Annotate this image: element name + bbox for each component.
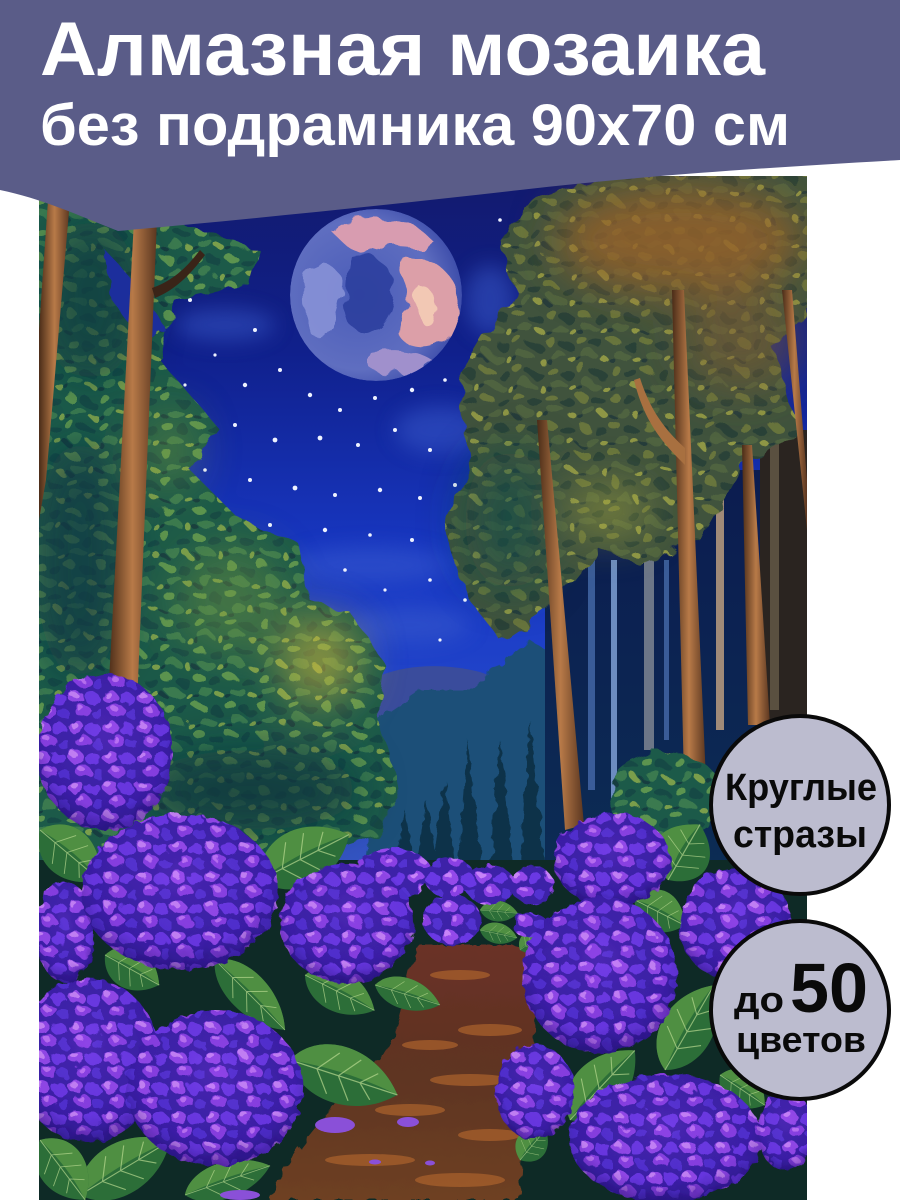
badge: up to 50 colours xyxy=(711,921,889,1099)
hydrangea leaves xyxy=(22,808,775,1200)
right tree canopy xyxy=(445,170,815,640)
far blossoms xyxy=(355,848,554,945)
stars xyxy=(183,218,502,642)
large blossoms xyxy=(16,674,813,1200)
badge: up to 50 colours: до xyxy=(734,979,784,1020)
badge: up to 50 colours: цветов xyxy=(736,1019,866,1060)
night sky xyxy=(161,176,807,860)
right deep forest with distant trunks xyxy=(545,430,807,870)
moon xyxy=(290,209,462,381)
ground shadow xyxy=(39,860,807,1200)
left sky gap xyxy=(105,250,165,340)
sky clouds xyxy=(175,265,515,643)
right tree trunks xyxy=(537,290,807,830)
title: Алмазная мозаика xyxy=(40,7,766,92)
left tree canopy xyxy=(30,190,400,860)
right canopy colour washes xyxy=(465,185,805,590)
artwork: moonlit forest with hydrangeas xyxy=(16,170,815,1200)
badge: up to 50 colours: 50 xyxy=(790,949,868,1027)
distant mountain ridge xyxy=(376,666,488,718)
left canopy colour washes xyxy=(35,220,360,830)
distant pine forest xyxy=(366,640,545,860)
badge: round rhinestones: Круглые xyxy=(725,767,877,809)
badge: round rhinestones: стразы xyxy=(733,814,867,856)
badge: round rhinestones xyxy=(711,716,889,894)
dirt path xyxy=(270,945,535,1200)
fallen petals xyxy=(220,1117,435,1200)
hydrangea blossoms xyxy=(16,674,813,1200)
left tree trunks xyxy=(39,200,205,705)
low shrub right xyxy=(607,753,723,837)
header banner xyxy=(0,0,900,231)
subtitle: без подрамника 90х70 см xyxy=(40,93,790,158)
